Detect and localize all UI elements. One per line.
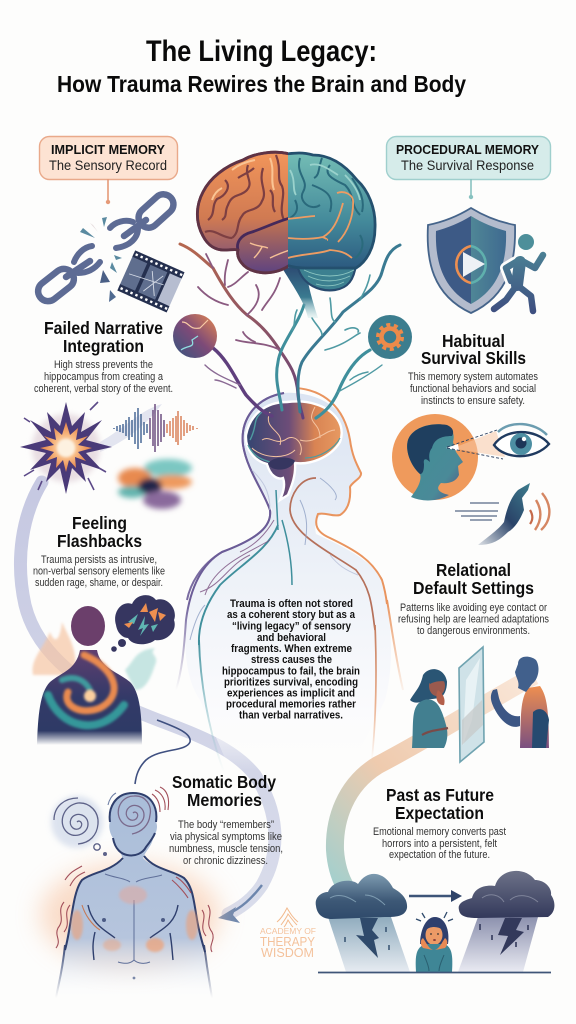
icon: head avoiding eye contact — [392, 414, 505, 500]
central human silhouette — [176, 388, 403, 772]
central summary text — [222, 598, 360, 722]
mirror — [459, 647, 484, 762]
icon: watchful eye — [494, 424, 549, 456]
title — [57, 35, 466, 97]
central summary text: fragments. When extreme — [231, 643, 352, 655]
dizziness spirals — [54, 796, 150, 844]
heading: past as future expectation: Past as Future — [386, 785, 494, 805]
right hemisphere — [286, 153, 375, 268]
icon: flashback person — [33, 606, 156, 745]
heading: past as future expectation: Expectation — [395, 803, 484, 823]
icon: worried person — [416, 912, 453, 972]
title: The Living Legacy: — [146, 35, 377, 68]
icon: broken chain — [34, 190, 178, 305]
icon: sound wave — [114, 404, 197, 452]
text: failed narrative: coherent, verbal story of the event. — [34, 383, 173, 395]
icon: right storm cloud — [458, 871, 554, 972]
text: habitual survival skills: instincts to ensure safety. — [421, 395, 525, 407]
text: past as future expectation: Emotional memory converts past — [373, 826, 506, 838]
title: How Trauma Rewires the Brain and Body — [57, 71, 466, 97]
swirl — [48, 655, 124, 725]
text: feeling flashbacks: non-verbal sensory elements like — [33, 566, 165, 578]
implicit memory label: IMPLICIT MEMORY — [51, 142, 165, 157]
text: feeling flashbacks: sudden rage, shame, or despair. — [35, 577, 163, 589]
text: habitual survival skills — [408, 371, 538, 407]
text: habitual survival skills: This memory system automates — [408, 371, 538, 383]
text: failed narrative: hippocampus from creating a — [44, 371, 163, 383]
procedural memory label: The Survival Response — [401, 158, 534, 173]
implicit memory label — [40, 136, 178, 204]
illustration: person at mirror — [410, 647, 549, 762]
text: feeling flashbacks: Trauma persists as intrusive, — [41, 554, 157, 566]
neural branches — [180, 244, 400, 418]
text: relational default settings: refusing help are learned adaptations — [398, 614, 549, 626]
text: relational default settings: to dangerous environments. — [417, 625, 530, 637]
text: somatic body memories — [169, 819, 283, 867]
text: habitual survival skills: functional behaviors and social — [410, 383, 536, 395]
central summary text: procedural memories rather — [226, 698, 357, 710]
heading: relational default settings — [413, 560, 534, 598]
logo: academy of therapy wisdom: ACADEMY OF — [260, 927, 316, 936]
icon: torn film strip — [117, 250, 185, 312]
squiggles — [56, 787, 213, 952]
brainstem — [281, 266, 318, 318]
node: broken lightning sphere — [173, 314, 217, 358]
heading: somatic body memories — [172, 772, 276, 810]
implicit memory label: The Sensory Record — [49, 158, 167, 173]
temporal lobe — [239, 220, 288, 272]
logo: academy of therapy wisdom — [260, 908, 316, 960]
silhouette — [37, 650, 142, 745]
icon: blurred memory smudge — [118, 459, 192, 509]
text: past as future expectation: expectation of the future. — [389, 849, 490, 861]
heading: relational default settings: Relational — [436, 560, 511, 580]
text: past as future expectation: horrors into a persistent, felt — [382, 838, 497, 850]
central summary text: and behavioral — [257, 632, 326, 644]
head brain — [246, 401, 342, 500]
icon: arrow between clouds — [409, 890, 462, 902]
heading: habitual survival skills: Habitual — [442, 331, 505, 351]
logo: academy of therapy wisdom: THERAPY — [260, 935, 316, 949]
text: failed narrative — [34, 359, 173, 395]
procedural memory label: PROCEDURAL MEMORY — [396, 142, 539, 157]
central summary text: prioritizes survival, encoding — [224, 676, 358, 688]
central summary text: stress causes the — [251, 654, 332, 666]
icon: shattered fragments — [80, 217, 122, 302]
icon: left storm cloud — [316, 874, 410, 972]
heading: habitual survival skills: Survival Skills — [421, 348, 526, 368]
heading: habitual survival skills — [421, 331, 526, 368]
icon: raised hand refusing help — [455, 483, 549, 545]
central summary text: than verbal narratives. — [239, 710, 343, 722]
heading: somatic body memories: Memories — [187, 790, 262, 810]
central summary text: as a coherent story but as a — [227, 609, 356, 621]
heading: failed narrative integration — [44, 318, 163, 356]
heading: feeling flashbacks: Flashbacks — [57, 531, 142, 551]
text: past as future expectation — [373, 826, 506, 861]
tension heat — [71, 886, 198, 952]
text: relational default settings: Patterns like avoiding eye contact or — [400, 602, 547, 614]
logo: academy of therapy wisdom: WISDOM — [261, 946, 314, 960]
central summary text: “living legacy” of sensory — [232, 620, 352, 632]
central summary text: Trauma is often not stored — [230, 598, 353, 610]
text: somatic body memories: via physical symptoms like — [170, 831, 282, 843]
text: somatic body memories: The body “remembers” — [178, 819, 274, 831]
text: relational default settings — [398, 602, 549, 637]
cerebellum — [298, 264, 356, 290]
main brain — [197, 152, 375, 318]
text: somatic body memories: or chronic dizziness. — [183, 855, 268, 867]
torso — [56, 793, 212, 1000]
central summary text: hippocampus to fail, the brain — [222, 666, 360, 678]
icon: thought cloud with shards — [111, 595, 175, 652]
heading: feeling flashbacks: Feeling — [72, 513, 127, 533]
woman — [410, 669, 448, 748]
flames — [33, 622, 76, 675]
procedural memory label — [386, 136, 550, 199]
icon: sensory burst — [20, 402, 112, 494]
heading: past as future expectation — [386, 785, 494, 823]
heading: feeling flashbacks — [57, 513, 142, 551]
runner — [494, 234, 543, 311]
ground line — [318, 972, 551, 974]
text: feeling flashbacks — [33, 554, 165, 589]
central summary text: experiences as implicit and — [227, 688, 355, 700]
heading: failed narrative integration: Failed Narrative — [44, 318, 163, 338]
heading: failed narrative integration: Integration — [63, 336, 144, 356]
heading: somatic body memories: Somatic Body — [172, 772, 276, 792]
heading: relational default settings: Default Settings — [413, 578, 534, 598]
text: failed narrative: High stress prevents the — [54, 359, 153, 371]
swoosh: peach to teal flow — [335, 676, 534, 888]
node: gear sphere — [368, 315, 412, 359]
swoosh: purple flow from burst to body — [20, 404, 275, 923]
illustration: somatic body — [40, 787, 220, 1000]
icon: shield with play and runner — [428, 208, 543, 313]
man — [491, 657, 549, 748]
left hemisphere — [197, 152, 290, 273]
text: somatic body memories: numbness, muscle tension, — [169, 843, 283, 855]
